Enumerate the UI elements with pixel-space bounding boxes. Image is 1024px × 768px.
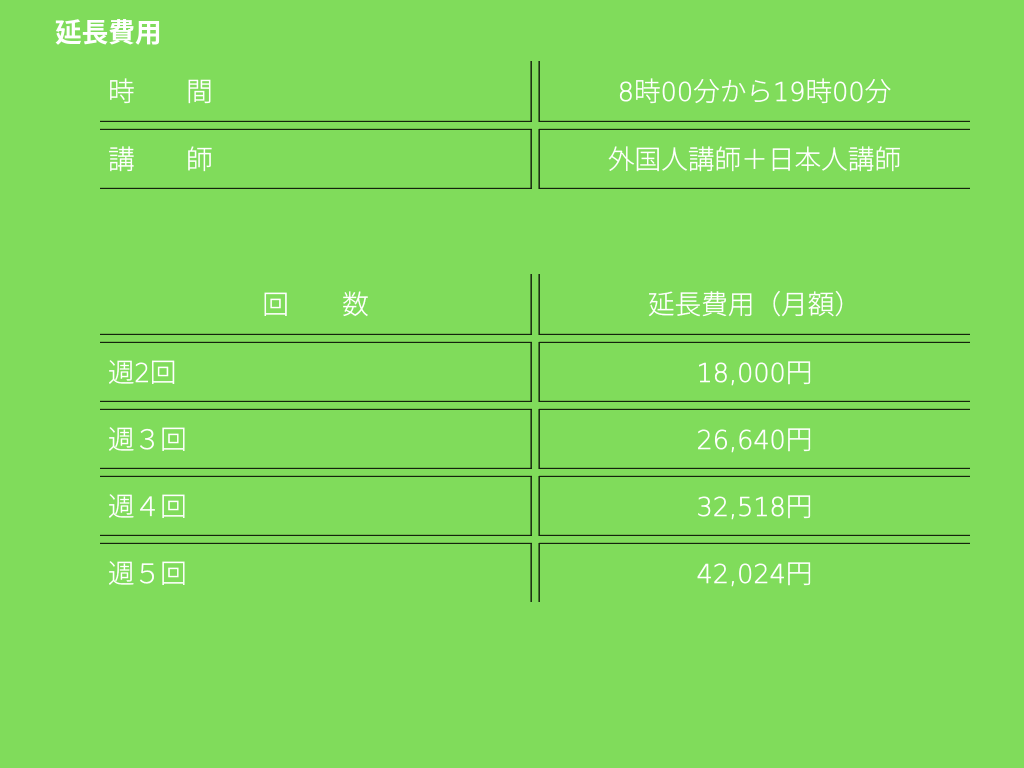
value: instructor: 外国人講師＋日本人講師 <box>608 138 901 177</box>
row value: four times weekly: 32,518円 <box>697 485 812 524</box>
row value: three times weekly: 26,640円 <box>697 418 812 457</box>
header: monthly fee: 延長費用（月額） <box>648 283 861 322</box>
row label: five times weekly: 週５回 <box>108 552 186 591</box>
row value: five times weekly: 42,024円 <box>697 552 812 591</box>
label: time: 時 間 <box>108 70 212 109</box>
row label: four times weekly: 週４回 <box>108 485 186 524</box>
row value: twice weekly: 18,000円 <box>697 351 812 390</box>
row label: three times weekly: 週３回 <box>108 418 186 457</box>
label: instructor: 講 師 <box>108 138 212 177</box>
title: 延長費用 <box>55 11 162 50</box>
header: count: 回 数 <box>262 283 369 322</box>
row label: twice weekly: 週2回 <box>108 351 176 390</box>
value: time: 8時00分から19時00分 <box>618 70 891 109</box>
